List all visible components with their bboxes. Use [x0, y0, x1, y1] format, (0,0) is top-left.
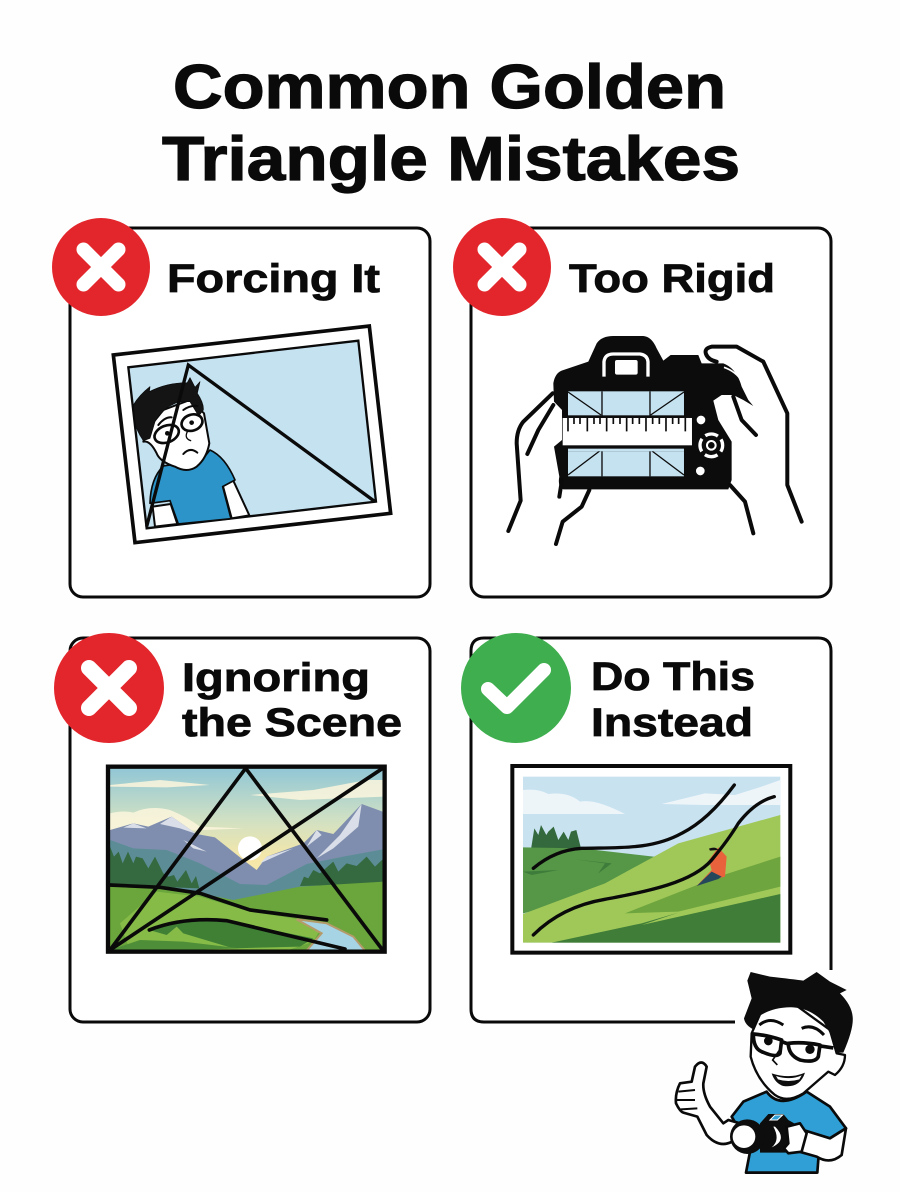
panel border [70, 638, 430, 1022]
heading: ignoring the scene: the Scene [182, 701, 402, 745]
heading: do this instead: Do This [591, 655, 755, 699]
title [162, 53, 740, 194]
panel: forcing it [52, 218, 430, 597]
ruler [562, 415, 693, 451]
illustration: camera held in hands with ruler [508, 336, 802, 544]
panel: too rigid [453, 218, 831, 597]
icon: red cross [453, 218, 551, 316]
heading: forcing it: Forcing It [167, 257, 380, 301]
hair [744, 972, 853, 1053]
arm and thumbs up hand [676, 1062, 740, 1144]
title: Triangle Mistakes [162, 125, 740, 194]
illustration: tilted photo of worried man [113, 326, 391, 543]
panel border [70, 228, 430, 597]
glasses [753, 1034, 833, 1061]
controls [697, 416, 705, 424]
panel: ignoring the scene [54, 633, 430, 1022]
man [133, 378, 249, 527]
panel border [471, 228, 831, 597]
screen [568, 391, 684, 476]
panel border [471, 638, 831, 1022]
viewfinder [604, 354, 648, 377]
title: Common Golden [173, 53, 726, 122]
heading: ignoring the scene [182, 656, 402, 745]
icon: red cross [52, 218, 150, 316]
brows, nose and mouth [759, 1020, 824, 1035]
hand on camera [784, 1123, 807, 1153]
hands [508, 347, 802, 544]
right arm [792, 1127, 846, 1160]
illustration: hillside photo with natural lines [512, 766, 790, 953]
heading: ignoring the scene: Ignoring [182, 656, 370, 700]
face [751, 1003, 845, 1099]
shirt [732, 1092, 846, 1173]
panel: do this instead [461, 633, 831, 1022]
icon: smiling photographer with thumbs up [676, 972, 853, 1173]
hiker [697, 847, 727, 886]
icon: green check [461, 633, 571, 743]
heading: do this instead: Instead [591, 701, 753, 745]
heading: do this instead [591, 655, 755, 745]
illustration: mountain landscape with triangle overlay [108, 767, 385, 952]
heading: too rigid: Too Rigid [569, 257, 775, 301]
camera body [553, 336, 753, 489]
camera [760, 1114, 800, 1153]
icon: red cross [54, 633, 164, 743]
